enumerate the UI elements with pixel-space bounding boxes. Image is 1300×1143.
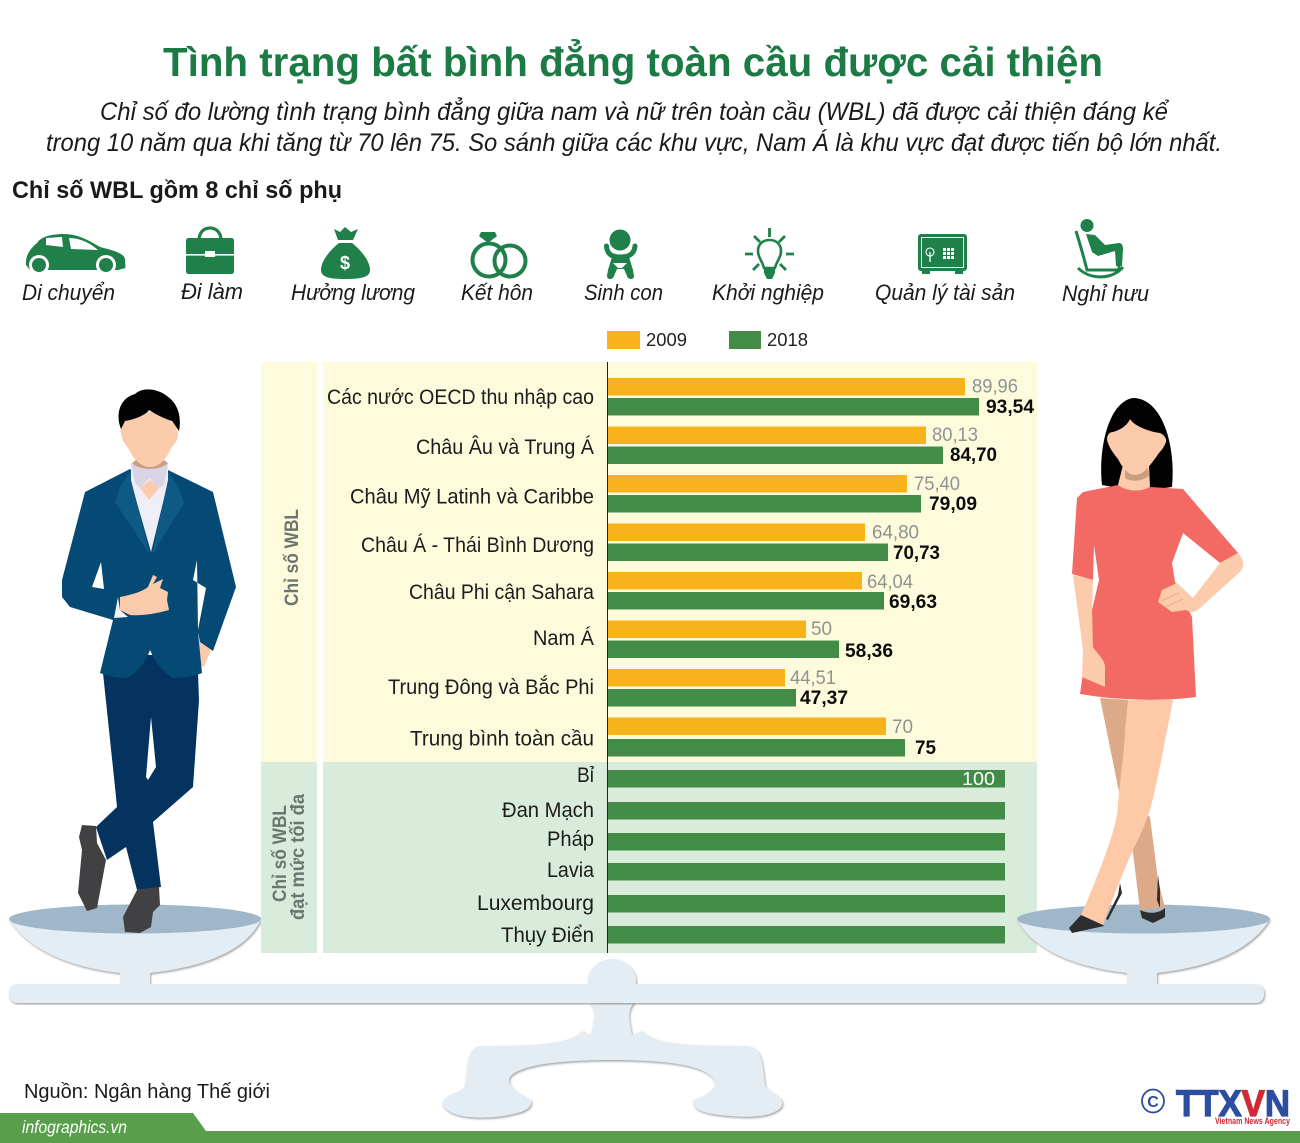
side label: maximum WBL index: đạt mức tối đa: [288, 794, 309, 920]
side label: maximum WBL index: Chỉ số WBL: [270, 805, 291, 902]
scale: right bowl: [1017, 919, 1270, 990]
row: Nam Á: [533, 618, 893, 662]
row: Lavia: [547, 859, 1005, 882]
icon: rocking chair, Nghỉ hưu: Nghỉ hưu: [1062, 281, 1149, 306]
footer band: infographics.vn: [22, 1117, 127, 1137]
icon: briefcase, Đi làm: Đi làm: [181, 279, 243, 304]
row: Bỉ: 100: [962, 768, 995, 789]
row: Châu Âu và Trung Á: [416, 424, 997, 466]
figure: man: [62, 389, 236, 933]
row: Trung Đông và Bắc Phi: [388, 667, 848, 709]
row: Châu Phi cận Sahara: Châu Phi cận Sahara: [409, 581, 594, 604]
row: Trung bình toàn cầu: 75: [915, 738, 936, 759]
logo: TTXVN: TTXVN: [1176, 1083, 1290, 1124]
row: Châu Á - Thái Bình Dương: 64,80: [872, 522, 919, 544]
row: Châu Âu và Trung Á: 80,13: [932, 424, 978, 446]
legend: 2018: [767, 329, 808, 350]
row: Trung Đông và Bắc Phi: Trung Đông và Bắc Phi: [388, 676, 594, 699]
row: Châu Mỹ Latinh và Caribbe: 75,40: [914, 473, 960, 495]
icon: wedding rings, Kết hôn: Kết hôn: [461, 280, 533, 305]
scale: left bowl: [9, 919, 261, 990]
icon: safe, Quản lý tài sản: Quản lý tài sản: [875, 280, 1015, 305]
icon: safe, Quản lý tài sản: [875, 234, 1015, 305]
row: Châu Á - Thái Bình Dương: Châu Á - Thái Bình Dương: [361, 534, 594, 557]
row: Châu Á - Thái Bình Dương: [361, 522, 940, 564]
row: Trung Đông và Bắc Phi: 44,51: [790, 667, 836, 689]
row: Trung bình toàn cầu: 70: [892, 716, 913, 738]
row: Thụy Điển: Thụy Điển: [501, 924, 594, 947]
row: Pháp: [547, 828, 1005, 851]
icon: money bag, Hưởng lương: [291, 227, 415, 305]
scale: base and pillar: [442, 959, 782, 1118]
row: Châu Âu và Trung Á: 84,70: [950, 445, 997, 466]
row: Lavia: Lavia: [547, 859, 594, 882]
footer band: [0, 1113, 1300, 1143]
intro text: [46, 96, 1222, 157]
icon: car, Di chuyển: [22, 234, 126, 305]
row: Trung bình toàn cầu: [410, 716, 936, 759]
row: Châu Phi cận Sahara: 69,63: [889, 592, 937, 613]
icon: light bulb, Khởi nghiệp: [712, 228, 824, 305]
row: Các nước OECD thu nhập cao: 89,96: [972, 376, 1018, 398]
row: Châu Mỹ Latinh và Caribbe: [350, 473, 977, 515]
row: Châu Mỹ Latinh và Caribbe: 79,09: [929, 494, 977, 515]
icon: baby, Sinh con: [584, 230, 663, 305]
row: Đan Mạch: [502, 799, 1005, 822]
row: Pháp: Pháp: [547, 828, 594, 851]
source note: Nguồn: Ngân hàng Thế giới: [24, 1080, 270, 1103]
legend: [607, 329, 808, 350]
sub-indicators heading: Chỉ số WBL gồm 8 chỉ số phụ: [12, 177, 342, 204]
row: Nam Á: Nam Á: [533, 627, 594, 650]
panel: chart background: [261, 362, 1037, 953]
intro text: trong 10 năm qua khi tăng từ 70 lên 75. So sánh giữa các khu vực, Nam Á là khu vực đạt được tiến bộ lớn nhất.: [46, 128, 1222, 157]
row: Châu Á - Thái Bình Dương: 70,73: [893, 543, 940, 564]
side label: maximum WBL index: [270, 794, 309, 920]
icon: wedding rings, Kết hôn: [461, 232, 533, 305]
icon: baby, Sinh con: Sinh con: [584, 280, 663, 305]
title: Tình trạng bất bình đẳng toàn cầu được cải thiện: [163, 38, 1103, 85]
row: Châu Phi cận Sahara: [409, 571, 937, 613]
icon: briefcase, Đi làm: [181, 228, 243, 304]
icon: car, Di chuyển: Di chuyển: [22, 280, 115, 305]
row: Thụy Điển: [501, 924, 1005, 947]
scale: beam: [9, 984, 1264, 1003]
row: Châu Mỹ Latinh và Caribbe: Châu Mỹ Latinh và Caribbe: [350, 486, 594, 508]
row: Luxembourg: Luxembourg: [477, 892, 594, 915]
scale: right bowl top: [1017, 904, 1270, 934]
side label: WBL index: Chỉ số WBL: [282, 509, 303, 606]
row: Các nước OECD thu nhập cao: [327, 376, 1034, 418]
figure: woman: [1069, 398, 1243, 933]
row: Châu Âu và Trung Á: Châu Âu và Trung Á: [416, 436, 594, 459]
legend: 2009: [646, 329, 687, 350]
row: Nam Á: 58,36: [845, 641, 893, 662]
row: Các nước OECD thu nhập cao: 93,54: [986, 397, 1034, 418]
row: Châu Phi cận Sahara: 64,04: [867, 571, 913, 593]
icon: light bulb, Khởi nghiệp: Khởi nghiệp: [712, 280, 824, 305]
icon: rocking chair, Nghỉ hưu: [1062, 219, 1149, 306]
row: Trung bình toàn cầu: Trung bình toàn cầu: [410, 728, 594, 750]
row: Bỉ: [577, 764, 1005, 789]
row: Luxembourg: [477, 892, 1005, 915]
row: Nam Á: 50: [811, 618, 832, 640]
row: Bỉ: Bỉ: [577, 764, 594, 787]
icon: money bag, Hưởng lương: $: [340, 253, 350, 273]
icon: money bag, Hưởng lương: Hưởng lương: [291, 280, 415, 305]
logo: TTXVN: C: [1147, 1094, 1159, 1111]
intro text: Chỉ số đo lường tình trạng bình đẳng giữa nam và nữ trên toàn cầu (WBL) đã được cải thiện đáng kể: [100, 96, 1169, 126]
row: Trung Đông và Bắc Phi: 47,37: [800, 688, 848, 709]
scale: left bowl top: [9, 904, 261, 934]
row: Đan Mạch: Đan Mạch: [502, 799, 594, 822]
row: Các nước OECD thu nhập cao: Các nước OECD thu nhập cao: [327, 386, 594, 409]
